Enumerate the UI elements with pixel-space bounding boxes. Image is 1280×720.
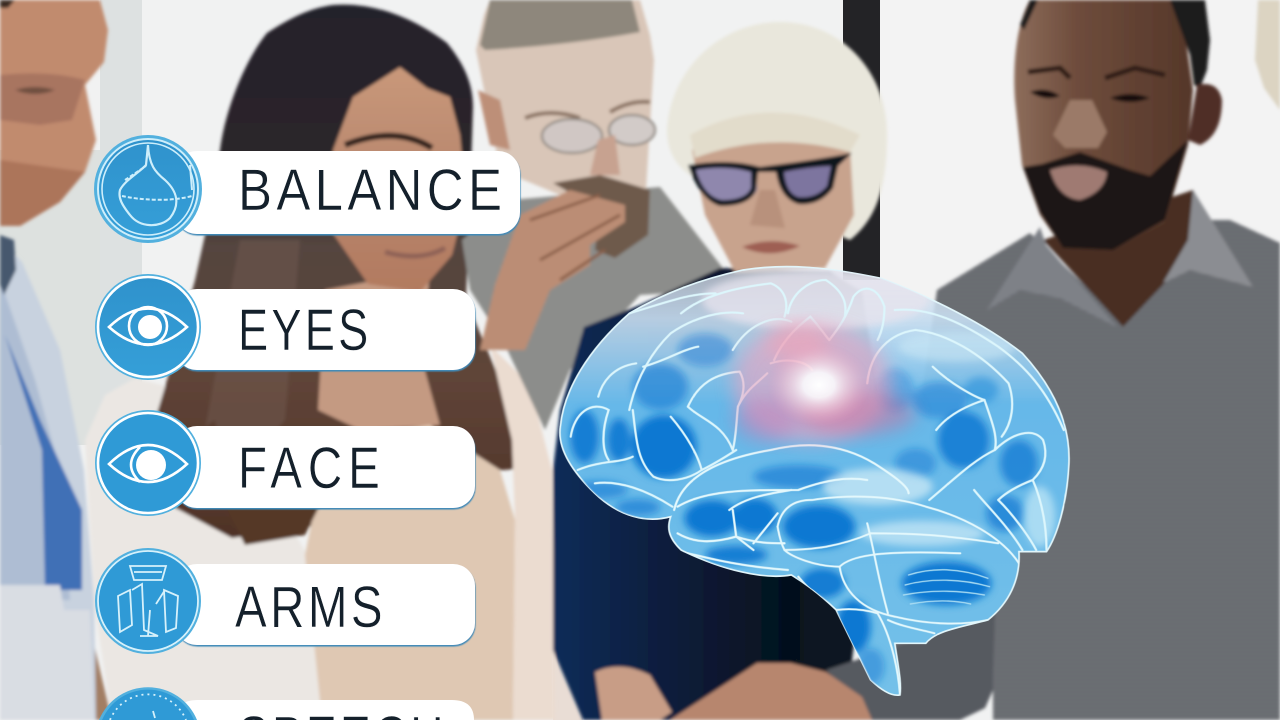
deep blue shading of the lobes	[569, 270, 1064, 695]
icon: face eye	[95, 410, 201, 516]
face pill	[175, 426, 475, 508]
brain outer silhouette	[560, 267, 1069, 695]
person: partial blond hair at top right	[1255, 0, 1280, 110]
arms label: ARMS	[235, 576, 383, 640]
cerebellum and brain stem lines	[778, 497, 1019, 695]
brain hologram	[560, 267, 1069, 695]
icon: arms	[95, 548, 201, 654]
item: balance	[94, 135, 520, 243]
person: man with beard on the right	[826, 0, 1280, 720]
person: woman with dark hair	[85, 5, 555, 720]
pink glow at the centre of the brain	[733, 323, 915, 443]
item: arms	[95, 548, 475, 654]
eyes pill	[175, 289, 475, 370]
symptom list	[94, 135, 520, 720]
icon: speech	[99, 687, 197, 720]
sulci: white fold lines of cerebrum	[571, 280, 1064, 550]
arms pill	[175, 564, 475, 645]
item: speech, cut off by the bottom edge	[99, 687, 474, 720]
pointing hand at bottom	[670, 663, 872, 720]
person: man at far left	[0, 0, 112, 720]
eyes label: EYES	[238, 299, 368, 363]
person: man with glasses and beard	[462, 0, 724, 430]
item: eyes	[95, 274, 475, 380]
balance label: BALANCE	[238, 158, 502, 223]
person: woman with blond hair and black glasses	[553, 22, 887, 720]
icon: eye	[95, 274, 201, 380]
face label: FACE	[238, 437, 380, 501]
pale highlights	[702, 270, 1055, 547]
item: face	[95, 410, 475, 516]
speech pill	[175, 700, 474, 720]
balance pill	[175, 151, 520, 234]
sulci: temporal lobe	[674, 445, 909, 570]
icon: balance droplet	[94, 135, 202, 243]
